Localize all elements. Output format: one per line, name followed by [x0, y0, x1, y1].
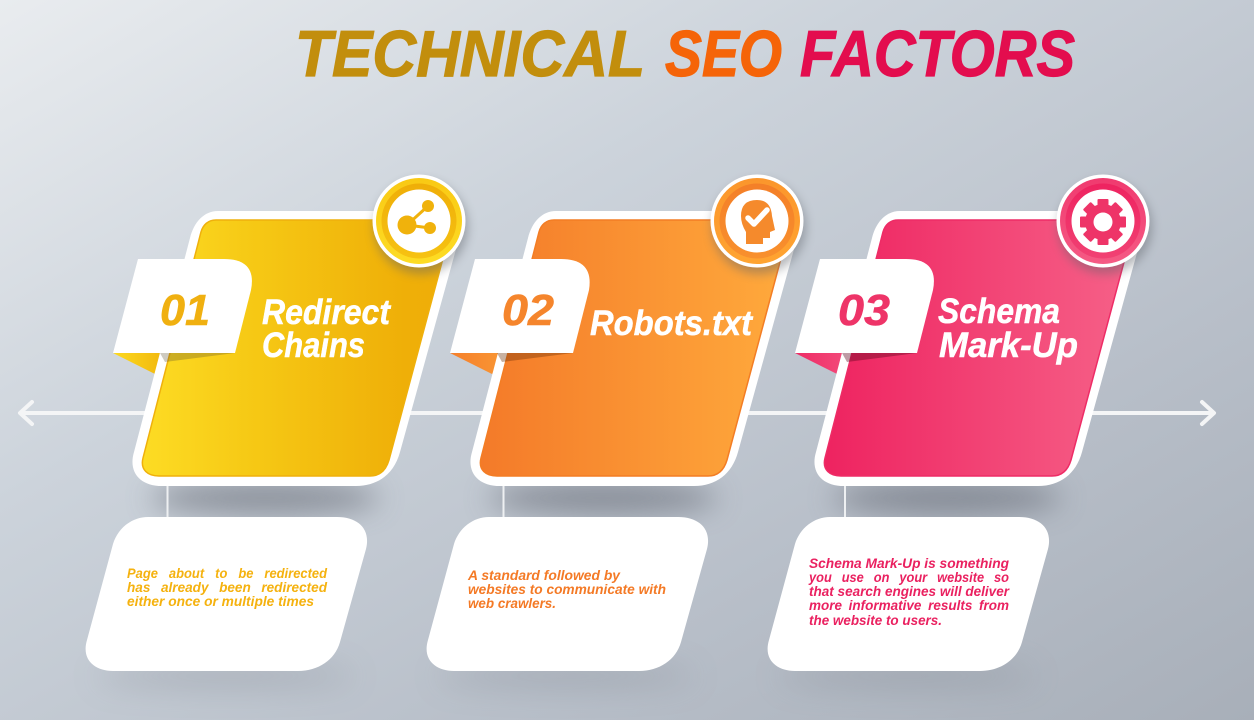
box 3 shape [768, 517, 1049, 671]
box 3 text: that search engines will deliver [809, 583, 1010, 599]
box 3 text [808, 555, 1010, 628]
card 1 number tag [113, 259, 252, 353]
card 1: Redirect Chains [113, 174, 468, 486]
card 3 colour panel [824, 220, 1132, 476]
icon: gear [1080, 199, 1126, 245]
card 2 badge shadow [712, 180, 806, 274]
card 3 badge [1056, 174, 1150, 268]
card 2 badge [710, 174, 804, 268]
icon: head with check [741, 200, 775, 244]
box 2 text: websites to communicate with [468, 581, 666, 597]
box 1 text: either once or multiple times [127, 593, 314, 609]
title: TECHNICAL [295, 17, 645, 90]
card 1 tag shadow [160, 353, 235, 362]
card 1 colour panel [142, 220, 450, 476]
box 3 text: Schema Mark-Up is something [809, 555, 1009, 571]
card 1 white frame [132, 211, 460, 486]
box 1 text: Page about to be redirected [127, 565, 327, 581]
icon: share [398, 200, 436, 234]
card 2 colour panel [480, 220, 788, 476]
card 2 heading: Robots.txt [590, 304, 753, 343]
card drop shadows [150, 482, 1062, 514]
card 1 heading [262, 293, 391, 365]
card 1 badge shadow [374, 180, 468, 274]
description box 2 [427, 517, 708, 671]
card 3: Schema Mark-Up [795, 174, 1152, 486]
title: SEO [665, 17, 782, 90]
card 2 tag shadow [497, 353, 573, 362]
card 2 number: 02 [502, 286, 555, 335]
card 1 heading: Redirect [262, 293, 391, 332]
card 3 number tag [795, 259, 934, 353]
box 1 text [127, 565, 327, 609]
card 2 white frame [470, 211, 798, 486]
card 2 number tag [450, 259, 590, 353]
card 3 tag fold [795, 353, 857, 374]
connector lines [168, 484, 845, 518]
description box 1 [86, 517, 367, 671]
title [295, 17, 1075, 90]
box 1 shape [86, 517, 367, 671]
box 3 text: you use on your website so [808, 569, 1009, 585]
card 3 badge shadow [1058, 180, 1152, 274]
box 2 text: web crawlers. [468, 595, 556, 611]
card 3 tag shadow [842, 353, 917, 362]
card 2 tag fold [450, 353, 512, 374]
card 3 number: 03 [838, 286, 890, 335]
card 3 heading: Mark-Up [939, 326, 1078, 365]
box 2 text: A standard followed by [467, 567, 621, 583]
card 3 heading [938, 292, 1078, 365]
description box 3 [768, 517, 1049, 671]
box 1 text: has already been redirected [127, 579, 327, 595]
card 1 heading: Chains [262, 326, 365, 365]
box 3 text: the website to users. [809, 612, 942, 628]
card 3 white frame [814, 211, 1142, 486]
card 2: Robots.txt [450, 174, 806, 486]
timeline arrow [20, 402, 1214, 424]
box 2 shape [427, 517, 708, 671]
box 3 text: more informative results from [809, 597, 1009, 613]
title: FACTORS [800, 17, 1075, 90]
card 1 badge [372, 174, 466, 268]
card 3 heading: Schema [938, 292, 1060, 331]
box 2 text [467, 567, 666, 611]
box drop shadows [95, 667, 1037, 685]
card 1 number: 01 [160, 286, 210, 335]
card 1 tag fold [113, 353, 175, 374]
